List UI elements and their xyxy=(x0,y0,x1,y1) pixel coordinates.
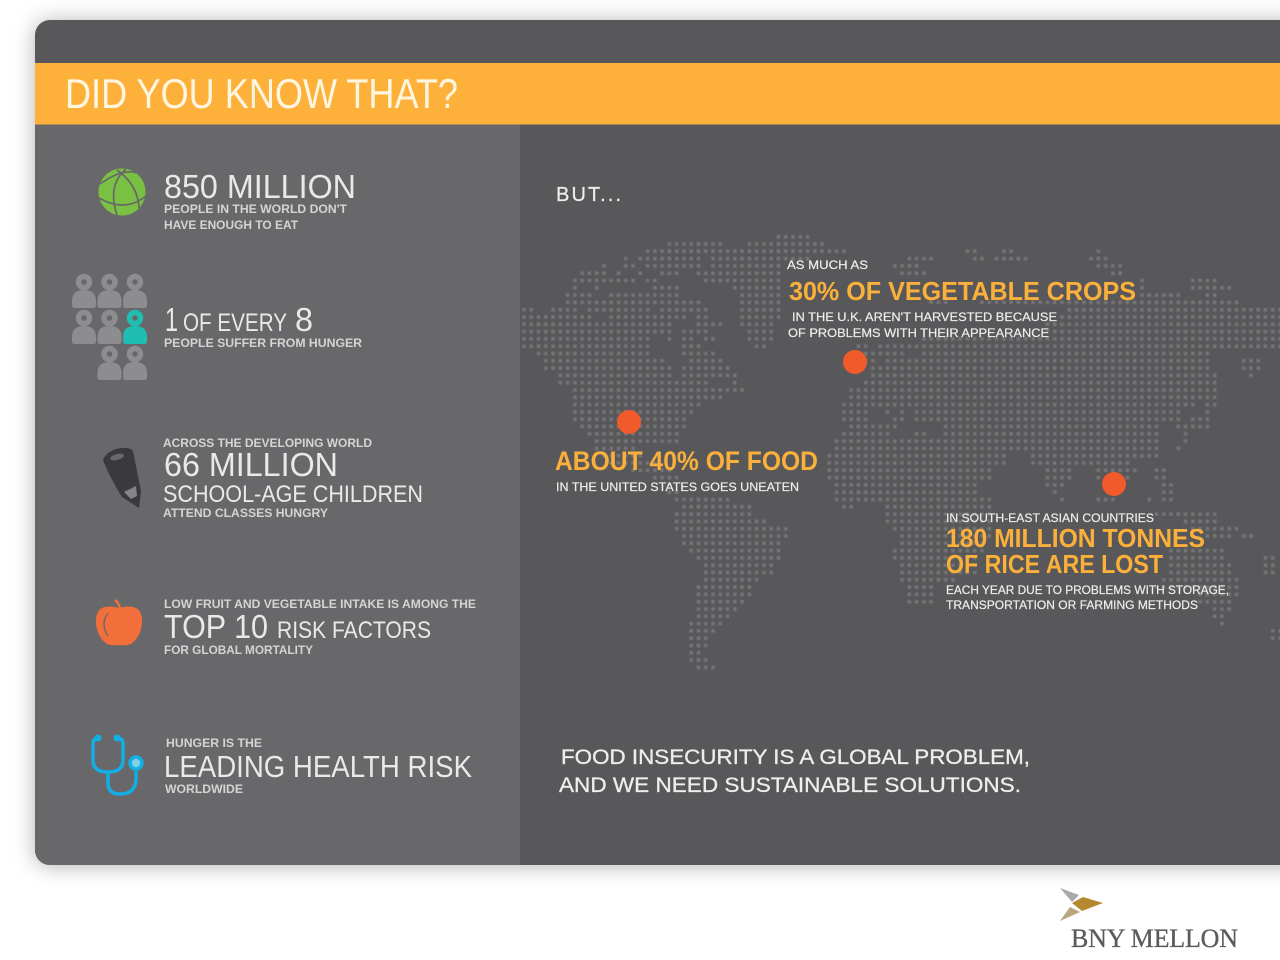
stat: 1 of every 8: OF EVERY xyxy=(183,309,287,337)
callout: South-East Asia rice: 180 MILLION TONNES xyxy=(946,523,1205,553)
callout: South-East Asia rice: IN SOUTH-EAST ASIAN COUNTRIES xyxy=(946,511,1154,525)
stat: leading health risk: LEADING HEALTH RISK xyxy=(164,749,472,784)
callout: UK vegetable crops xyxy=(787,258,1136,374)
callout: United States food: ABOUT 40% OF FOOD xyxy=(555,446,818,476)
callout: UK vegetable crops: IN THE U.K. AREN'T HARVESTED BECAUSE xyxy=(792,310,1057,324)
stat: 1 of every 8: 1 xyxy=(165,301,178,338)
stat: 1 of every 8: PEOPLE SUFFER FROM HUNGER xyxy=(164,338,363,350)
stat: top 10 risk factors: LOW FRUIT AND VEGETABLE INTAKE IS AMONG THE xyxy=(164,599,476,611)
stat: 66 million: SCHOOL-AGE CHILDREN xyxy=(163,481,423,508)
stat: leading health risk: WORLDWIDE xyxy=(165,784,243,796)
icon: stethoscope xyxy=(93,734,142,794)
map marker: UK xyxy=(843,350,867,374)
icon: group of people xyxy=(72,276,147,380)
map marker: United States xyxy=(617,410,641,434)
map marker: South-East Asia xyxy=(1102,472,1126,496)
stat: top 10 risk factors: TOP 10 xyxy=(164,608,268,645)
stat: 850 million: PEOPLE IN THE WORLD DON'T xyxy=(164,204,347,216)
stat: leading health risk: HUNGER IS THE xyxy=(166,738,262,750)
stat: 850 million: 850 MILLION xyxy=(164,168,356,205)
stat: 1 of every 8 xyxy=(72,276,363,380)
stat: 66 million: ACROSS THE DEVELOPING WORLD xyxy=(163,438,372,450)
closing statement: FOOD INSECURITY IS A GLOBAL PROBLEM, xyxy=(561,746,1030,769)
icon: pencil xyxy=(103,448,141,508)
stat: top 10 risk factors xyxy=(96,599,476,657)
panel: left statistics background xyxy=(35,124,520,865)
stat: 850 million: HAVE ENOUGH TO EAT xyxy=(164,220,298,232)
orange heading band xyxy=(35,63,1280,124)
logo: BNY Mellon: BNY MELLON xyxy=(1071,924,1238,953)
stat: 66 million xyxy=(103,438,423,520)
stat: top 10 risk factors: FOR GLOBAL MORTALITY xyxy=(164,645,313,657)
stat: top 10 risk factors: RISK FACTORS xyxy=(277,617,431,644)
stat: leading health risk xyxy=(93,734,472,796)
stat: 66 million: ATTEND CLASSES HUNGRY xyxy=(163,508,328,520)
callout: South-East Asia rice: OF RICE ARE LOST xyxy=(946,549,1163,579)
callout: United States food: IN THE UNITED STATES GOES UNEATEN xyxy=(556,480,799,494)
stat: 850 million xyxy=(98,168,356,232)
logo: BNY Mellon xyxy=(1060,888,1238,953)
icon: globe xyxy=(98,168,146,216)
callout: South-East Asia rice xyxy=(946,472,1229,612)
closing statement: AND WE NEED SUSTAINABLE SOLUTIONS. xyxy=(559,774,1021,797)
callout: UK vegetable crops: 30% OF VEGETABLE CROPS xyxy=(789,276,1136,306)
callout: South-East Asia rice: EACH YEAR DUE TO PROBLEMS WITH STORAGE, xyxy=(946,583,1229,597)
callout: UK vegetable crops: AS MUCH AS xyxy=(787,258,868,272)
icon: apple xyxy=(96,600,142,645)
closing statement xyxy=(559,746,1030,797)
callout: South-East Asia rice: TRANSPORTATION OR FARMING METHODS xyxy=(946,598,1198,612)
dotted world map xyxy=(522,237,1280,667)
callout: UK vegetable crops: OF PROBLEMS WITH THEIR APPEARANCE xyxy=(788,326,1049,340)
title: DID YOU KNOW THAT? xyxy=(65,70,458,117)
heading: but: BUT... xyxy=(556,184,621,206)
stat: 66 million: 66 MILLION xyxy=(164,446,338,483)
stat: 1 of every 8: 8 xyxy=(295,301,313,338)
callout: United States food xyxy=(555,410,818,494)
